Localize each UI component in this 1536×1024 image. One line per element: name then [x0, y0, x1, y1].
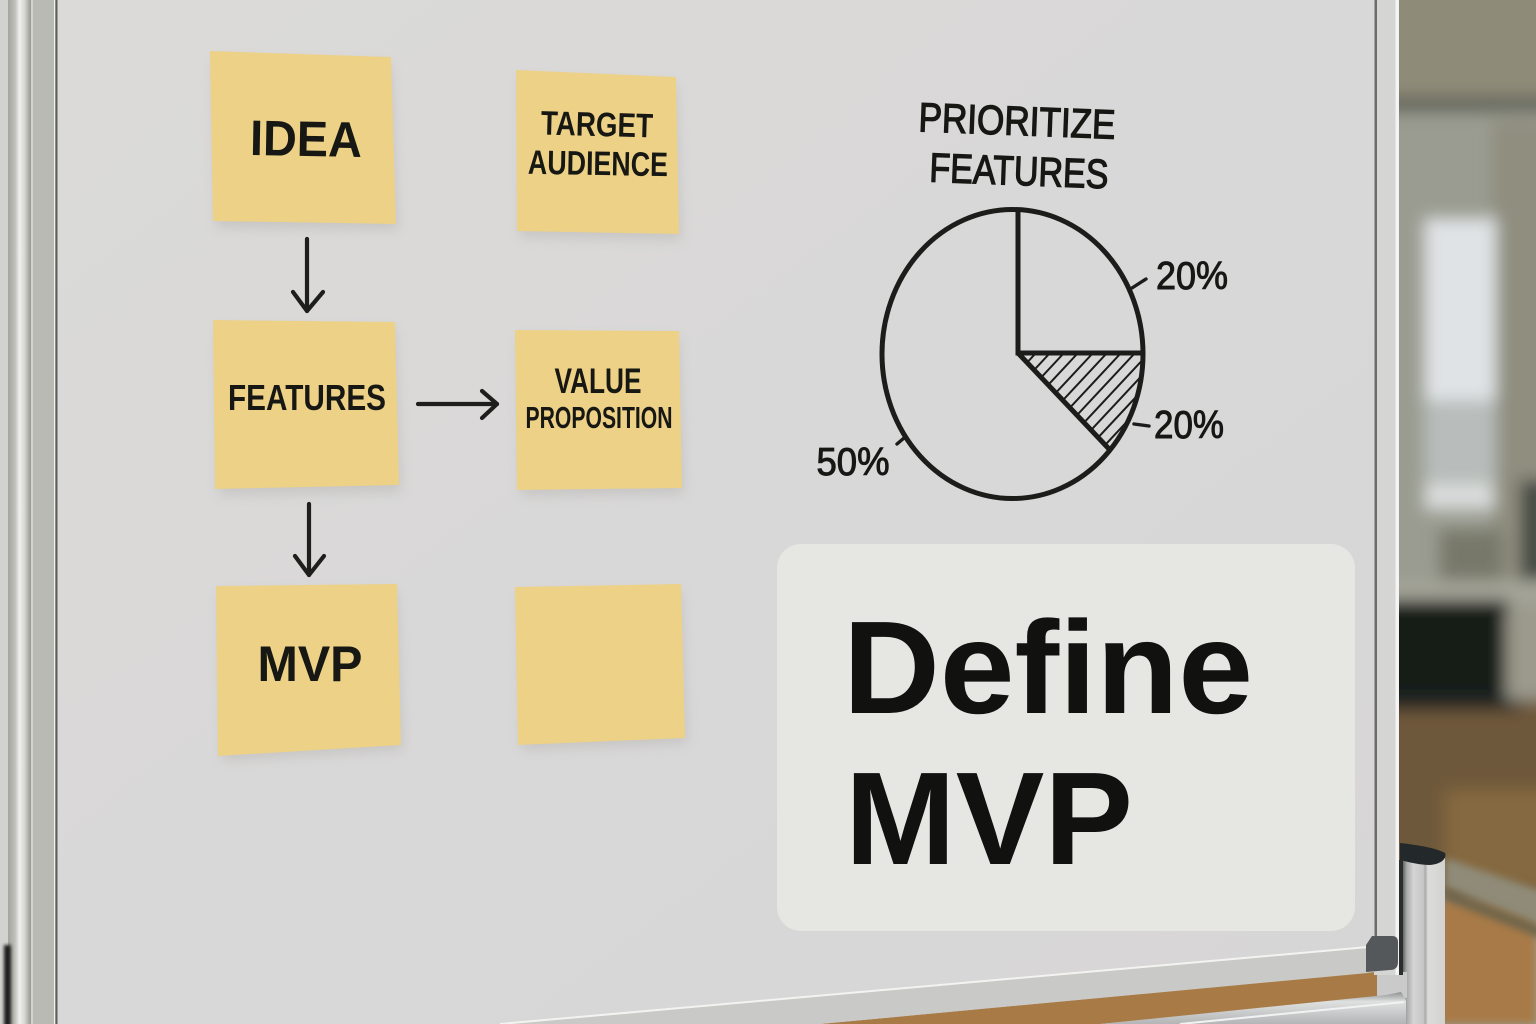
sticky note: TARGET AUDIENCE: TARGET: [540, 105, 654, 145]
frame corner cap: [1366, 936, 1398, 972]
sticky note: TARGET AUDIENCE: [516, 70, 679, 234]
floor strip under the board: [820, 972, 1402, 1024]
pie label: 20% lower: 20%: [1154, 404, 1224, 447]
chart title: prioritize features: FEATURES: [929, 145, 1109, 197]
sticky note: MVP: [216, 584, 401, 756]
sticky note: FEATURES: FEATURES: [228, 377, 386, 418]
arrow: features to value proposition: [418, 391, 497, 418]
title panel: Define MVP: [777, 544, 1355, 931]
chart title: prioritize features: [918, 94, 1116, 197]
sticky note: blank: [515, 584, 685, 745]
arrow: idea to features: [293, 239, 323, 311]
lower stand bar: [1100, 992, 1406, 1024]
pie chart: [880, 207, 1151, 501]
sticky note: VALUE PROPOSITION: VALUE: [554, 362, 642, 401]
sticky note: TARGET AUDIENCE: AUDIENCE: [528, 144, 668, 184]
sticky note: IDEA: IDEA: [250, 110, 362, 168]
pie label: 50%: 50%: [816, 441, 890, 484]
chart title: prioritize features: PRIORITIZE: [918, 94, 1116, 148]
pie label: 20% upper: 20%: [1156, 255, 1228, 298]
note shadows: [214, 60, 687, 761]
sticky note: VALUE PROPOSITION: [515, 330, 682, 490]
sticky note: VALUE PROPOSITION: PROPOSITION: [526, 400, 672, 435]
sticky note: FEATURES: [213, 320, 399, 489]
sticky note: IDEA: [210, 51, 396, 224]
arrow: features to MVP: [295, 504, 324, 575]
hatched slice: [1028, 356, 1140, 444]
sticky note: MVP: MVP: [258, 636, 362, 692]
title panel: Define MVP: MVP: [845, 745, 1133, 892]
blurred office background: [1380, 0, 1536, 1024]
stand post and cap: [1377, 843, 1445, 1024]
right frame: [1374, 0, 1403, 975]
bottom frame rail: [500, 947, 1368, 1024]
title panel: Define MVP: Define: [843, 594, 1253, 741]
left pole and frame: [0, 0, 58, 1024]
